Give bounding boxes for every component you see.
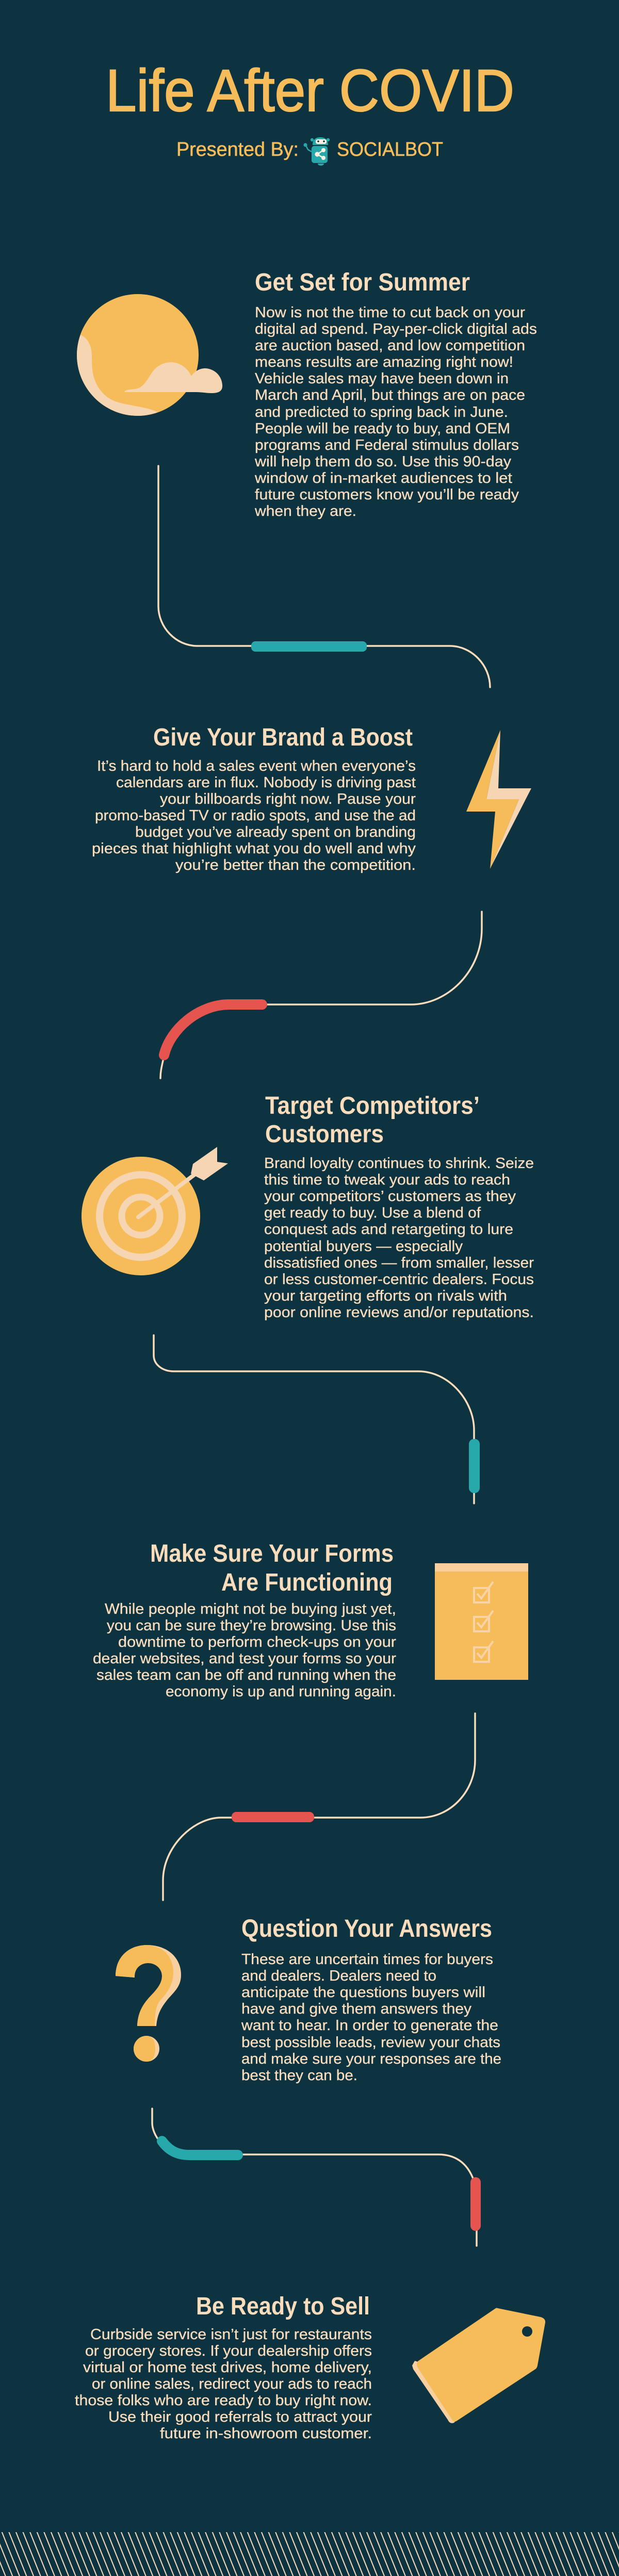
body text	[254, 304, 537, 520]
body text: programs and Federal stimulus dollars	[255, 437, 519, 453]
body text: your competitors’ customers as they	[264, 1188, 516, 1205]
connector 5 with teal and red accents	[152, 2109, 481, 2246]
body text: Now is not the time to cut back on your	[255, 304, 525, 321]
body text: Curbside service isn’t just for restaurants	[90, 2326, 372, 2343]
body text: It’s hard to hold a sales event when everyone’s	[97, 758, 416, 774]
panel: get set for summer	[77, 269, 537, 520]
body text: get ready to buy. Use a blend of	[264, 1205, 481, 1221]
body text: have and give them answers they	[241, 2001, 472, 2017]
body text	[241, 1951, 501, 2084]
body text	[264, 1155, 534, 1321]
body text: Use their good referrals to attract your	[108, 2409, 372, 2425]
heading: Customers	[265, 1121, 384, 1148]
body text: best possible leads, review your chats	[241, 2034, 500, 2051]
body text: Brand loyalty continues to shrink. Seize	[264, 1155, 534, 1172]
body text: are auction based, and low competition	[255, 337, 525, 354]
body text: or online sales, redirect your ads to reach	[92, 2376, 372, 2392]
body text: when they are.	[254, 503, 356, 520]
body text: downtime to perform check-ups on your	[118, 1634, 396, 1650]
icon: socialbot robot logo	[303, 137, 330, 166]
heading: Are Functioning	[221, 1569, 393, 1596]
body text: future in-showroom customer.	[160, 2425, 372, 2442]
body text: promo-based TV or radio spots, and use the ad	[95, 807, 416, 824]
heading	[265, 1092, 480, 1148]
body text: calendars are in flux. Nobody is driving past	[116, 774, 416, 791]
heading: Make Sure Your Forms	[150, 1540, 394, 1567]
body text: dealer websites, and test your forms so your	[93, 1650, 396, 1667]
heading: Question Your Answers	[241, 1915, 492, 1942]
body text: window of in-market audiences to let	[254, 470, 512, 487]
panel: be ready to sell	[75, 2293, 545, 2442]
body text: want to hear. In order to generate the	[241, 2017, 498, 2034]
body text: best they can be.	[241, 2067, 357, 2084]
presented by label: Presented By:	[176, 139, 299, 160]
body text: those folks who are ready to buy right now.	[75, 2392, 372, 2409]
body text: pieces that highlight what you do well and why	[92, 840, 416, 857]
body text: These are uncertain times for buyers	[241, 1951, 493, 1968]
decorative striped footer band	[0, 2532, 619, 2576]
body text: conquest ads and retargeting to lure	[264, 1221, 513, 1238]
panel: make sure your forms are functioning	[93, 1540, 528, 1700]
presented by line	[176, 137, 443, 166]
body text: your targeting efforts on rivals with	[264, 1288, 507, 1304]
body text: you’re better than the competition.	[175, 857, 416, 873]
body text: poor online reviews and/or reputations.	[264, 1304, 534, 1321]
heading	[150, 1540, 394, 1596]
icon: target with arrow	[82, 1147, 228, 1275]
body text: future customers know you’ll be ready	[255, 487, 519, 503]
body text: Vehicle sales may have been down in	[255, 370, 509, 387]
heading: Get Set for Summer	[255, 269, 470, 296]
body text: will help them do so. Use this 90-day	[254, 453, 512, 470]
body text: sales team can be off and running when the	[96, 1667, 396, 1683]
body text: People will be ready to buy, and OEM	[255, 420, 510, 437]
body text: dissatisfied ones — from smaller, lesser	[264, 1255, 534, 1271]
body text	[92, 758, 416, 873]
panel: question your answers	[116, 1915, 501, 2084]
icon: checklist form	[435, 1563, 528, 1680]
heading: Give Your Brand a Boost	[153, 724, 413, 751]
title: Life After COVID	[106, 58, 514, 124]
panel: give your brand a boost	[92, 724, 531, 873]
icon: lightning bolt	[466, 730, 531, 869]
body text: or grocery stores. If your dealership offers	[85, 2343, 372, 2359]
body text	[75, 2326, 372, 2442]
body text: virtual or home test drives, home delivery,	[83, 2359, 372, 2376]
body text: means results are amazing right now!	[255, 354, 513, 370]
connector 1 with teal accent	[158, 466, 490, 687]
heading: Target Competitors’	[265, 1092, 480, 1120]
brand name: SOCIALBOT	[337, 139, 443, 160]
body text: and make sure your responses are the	[241, 2051, 501, 2067]
body text: your billboards right now. Pause your	[160, 791, 416, 807]
icon: sun and cloud	[77, 294, 222, 416]
body text: economy is up and running again.	[166, 1683, 396, 1700]
body text: and predicted to spring back in June.	[255, 404, 508, 420]
heading: Be Ready to Sell	[196, 2293, 370, 2320]
body text: budget you’ve already spent on branding	[135, 824, 416, 840]
body text: While people might not be buying just yet,	[105, 1601, 396, 1617]
body text: you can be sure they’re browsing. Use this	[107, 1617, 396, 1634]
body text	[93, 1601, 396, 1700]
body text: digital ad spend. Pay-per-click digital ads	[255, 321, 537, 337]
body text: or less customer-centric dealers. Focus	[264, 1271, 534, 1288]
panel: target competitors' customers	[82, 1092, 534, 1321]
body text: March and April, but things are on pace	[255, 387, 525, 403]
body text: anticipate the questions buyers will	[241, 1984, 485, 2001]
connector 2 with red accent	[160, 912, 482, 1078]
connector 4 with red accent	[163, 1713, 475, 1900]
icon: question mark	[116, 1945, 181, 2062]
connector 3 with teal accent	[154, 1335, 480, 1503]
body text: this time to tweak your ads to reach	[264, 1172, 510, 1188]
icon: price tag	[412, 2308, 545, 2423]
body text: potential buyers — especially	[264, 1238, 463, 1255]
body text: and dealers. Dealers need to	[241, 1968, 436, 1984]
